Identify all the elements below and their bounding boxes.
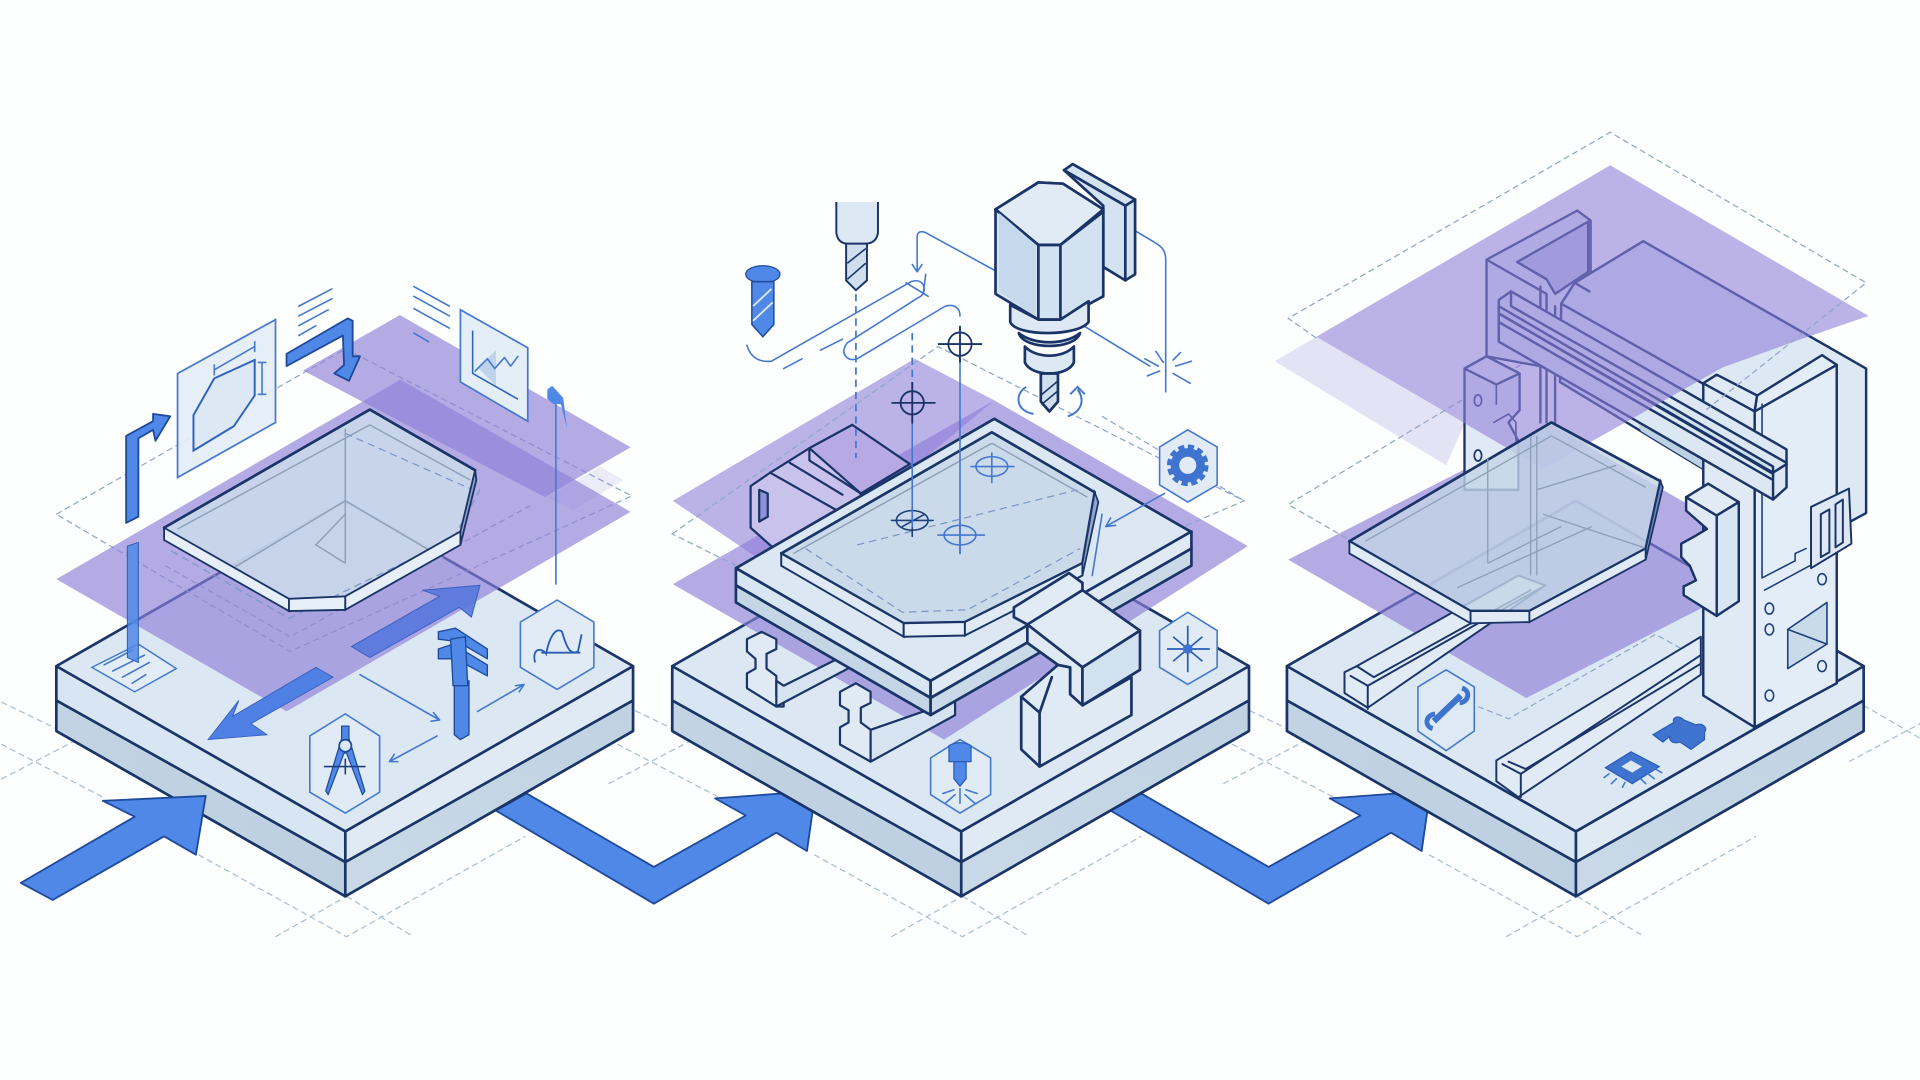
hexagon: laser icon [1160, 612, 1217, 684]
drill bit [836, 202, 878, 290]
spindle head [996, 164, 1135, 411]
hexagon: compass icon [310, 714, 380, 813]
T-slot rail 2 [840, 683, 955, 762]
arrow: step 1 to step 2 [496, 791, 816, 904]
tower block [1464, 356, 1520, 490]
carriage block [1681, 484, 1739, 616]
blueprint sheet [178, 320, 276, 478]
ground grid [0, 698, 1920, 937]
platform 1 [56, 501, 633, 896]
hexagon: gear icon [1160, 430, 1217, 502]
dashed outline plane [56, 349, 632, 651]
rear column [1487, 211, 1591, 422]
pale offset plane [547, 467, 623, 511]
panel: step 1 design [21, 287, 633, 900]
platform 2 [672, 501, 1249, 896]
clip bracket [1811, 489, 1851, 568]
arrow from gear to workpiece [1106, 493, 1164, 527]
motor box [1560, 241, 1866, 529]
chip icon [1604, 752, 1662, 787]
pale offset plane [1275, 337, 1464, 465]
target marks on workpiece [891, 453, 1014, 553]
rotation arrow [1018, 387, 1085, 416]
vertical alignment lines [856, 294, 960, 553]
arrow: step 2 to step 3 [1111, 791, 1430, 904]
notes lines right [414, 287, 449, 342]
beam rail [1499, 291, 1787, 500]
hexagon: drill icon [931, 740, 991, 813]
elbow arrow: top [287, 318, 360, 381]
puzzle icon [1653, 717, 1706, 749]
caliper icon [438, 628, 487, 740]
upper purple plane [673, 359, 994, 576]
T-slot rail 1 [747, 632, 857, 707]
lower purple plane [673, 400, 1248, 740]
rail B [1496, 637, 1701, 797]
hexagon: analysis icon [520, 600, 594, 689]
rail A [1344, 576, 1545, 709]
thin vertical connector [547, 386, 567, 584]
routing lines [747, 224, 1166, 373]
flat arrow left [208, 667, 333, 740]
rivet icon [746, 266, 780, 337]
panel: step 3 machine [1275, 132, 1869, 896]
dashed outline upper [1288, 132, 1866, 410]
hexagon: wrench icon [1418, 670, 1474, 751]
glass workpiece [781, 432, 1102, 637]
laser spark [1145, 350, 1191, 392]
lower purple plane [1288, 425, 1789, 698]
lower purple plane [56, 380, 631, 711]
right column [1703, 355, 1837, 727]
document on platform [92, 644, 176, 692]
thin arrows around caliper [360, 675, 524, 762]
elbow arrow: left [126, 414, 170, 523]
input arrow [21, 796, 206, 900]
dashed outline lower [1288, 289, 1708, 719]
dashed outline plane [672, 347, 1244, 648]
panel: step 2 machining [672, 164, 1249, 896]
front clamp block [1014, 573, 1140, 767]
upper purple plane [303, 315, 631, 497]
upper purple plane [1316, 165, 1869, 469]
flat arrow right [351, 585, 480, 658]
notes lines left [299, 289, 332, 336]
crosshair targets [891, 326, 982, 424]
central glass slab [164, 410, 480, 618]
middle carriage plate [736, 419, 1191, 715]
platform 3 [1287, 501, 1864, 896]
back clamp blocks [751, 425, 910, 557]
chart sheet [460, 310, 528, 421]
vertical arrow shaft [127, 542, 138, 662]
glass bed [1349, 422, 1663, 623]
column details [1762, 404, 1827, 701]
